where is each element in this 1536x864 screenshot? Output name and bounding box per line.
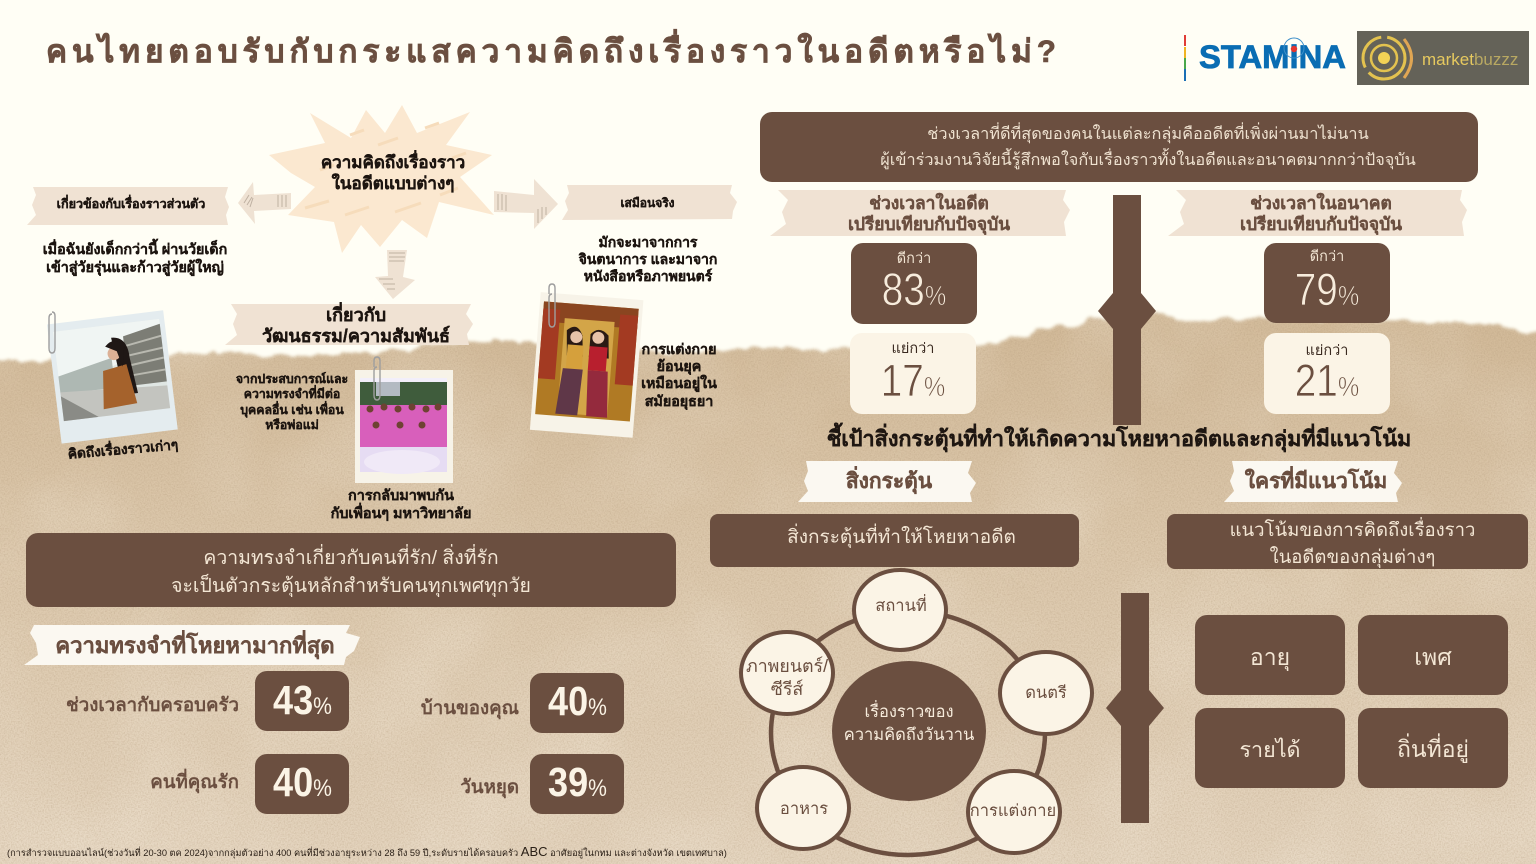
stat label: your home: บ้านของคุณ bbox=[421, 697, 519, 718]
text: personal description: เมื่อฉันยังเด็กกว่านี้ ผ่านวัยเด็ก bbox=[43, 242, 227, 258]
banner: personal bbox=[27, 187, 229, 225]
caption: period costume: การแต่งกาย bbox=[642, 342, 716, 358]
starburst heading: ในอดีตแบบต่างๆ bbox=[332, 174, 454, 193]
title: คนไทยตอบรับกับกระแสความคิดถึงเรื่องราวในอดีตหรือไม่? bbox=[46, 33, 1061, 69]
photo: Thai traditional dress bbox=[530, 283, 644, 438]
panel: trend heading: แนวโน้มของการคิดถึงเรื่องราว bbox=[1230, 519, 1475, 540]
label: dress: การแต่งกาย bbox=[970, 802, 1056, 820]
cycle diagram: nostalgia triggers bbox=[739, 568, 1094, 858]
divider arrow: vertical past future bbox=[1098, 195, 1156, 425]
label: film and series: ซีรีส์ bbox=[771, 679, 803, 699]
panel: triggers heading bbox=[710, 514, 1079, 567]
label: food: อาหาร bbox=[780, 800, 828, 818]
photo: woman on stairs bbox=[47, 310, 178, 444]
footnote: (การสำรวจแบบออนไลน์(ช่วงวันที่ 20-30 ตค 2024)จากกลุ่มตัวอย่าง 400 คนที่มีช่วงอายุระหว่าง 28 ถึง 59 ปี,ระดับรายได้ครอบครัว ABC อาศัยอยู่ในกทม และต่างจังหวัด เขตเทศบาล) bbox=[7, 844, 727, 859]
text: as if real description: หนังสือหรือภาพยนตร์ bbox=[584, 268, 712, 284]
banner: culture and relationships bbox=[225, 302, 473, 346]
trend box: region: ถิ่นที่อยู่ bbox=[1397, 736, 1469, 762]
stat label: holiday: วันหยุด bbox=[460, 776, 519, 797]
label: place: สถานที่ bbox=[875, 594, 927, 615]
banner text: ความทรงจำที่โหยหามากที่สุด bbox=[55, 633, 335, 658]
banner text: ช่วงเวลาในอดีต bbox=[869, 193, 989, 213]
text: experience and memory bbox=[236, 372, 348, 432]
panel: best time summary: ผู้เข้าร่วมงานวิจัยนี้รู้สึกพอใจกับเรื่องราวทั้งในอดีตและอนาคตมากกว่าปัจจุบัน bbox=[880, 151, 1416, 169]
text: experience and memory: ความทรงจำที่มีต่อ bbox=[244, 387, 340, 401]
banner text: ช่วงเวลาในอนาคต bbox=[1250, 193, 1392, 213]
stat: future better 79%: 79% bbox=[1295, 264, 1359, 315]
logo: marketbuzzz: marketbuzzz bbox=[1422, 50, 1518, 69]
text: as if real description: มักจะมาจากการ bbox=[599, 234, 697, 250]
banner text: เสมือนจริง bbox=[620, 196, 675, 210]
stat: future better 79%: ดีกว่า bbox=[1310, 249, 1344, 265]
banner: who trends bbox=[1224, 461, 1402, 502]
trend box: gender: เพศ bbox=[1414, 644, 1452, 670]
banner text bbox=[262, 302, 450, 346]
banner text: เกี่ยวข้องกับเรื่องราวส่วนตัว bbox=[57, 197, 205, 211]
stat label: loved one: คนที่คุณรัก bbox=[150, 771, 239, 792]
stat: past better 83%: 83% bbox=[882, 264, 946, 315]
text: personal description bbox=[43, 238, 227, 276]
caption: period costume: ย้อนยุค bbox=[657, 359, 701, 375]
logo: marketbuzzz bbox=[1357, 31, 1529, 85]
trend box: income: รายได้ bbox=[1240, 738, 1300, 762]
trend box: income bbox=[1195, 708, 1345, 788]
panel: memory of loved ones: ความทรงจำเกี่ยวกับคนที่รัก/ สิ่งที่รัก bbox=[203, 546, 499, 568]
divider arrow: triggers to trends bbox=[1106, 593, 1164, 823]
banner: most missed memories bbox=[24, 625, 360, 665]
text: experience and memory: จากประสบการณ์และ bbox=[236, 372, 348, 386]
caption: period costume: สมัยอยุธยา bbox=[645, 394, 713, 410]
stat: past better 83% bbox=[851, 243, 977, 324]
stat: 40% home: 40% bbox=[548, 678, 606, 724]
arrow: down bbox=[375, 250, 415, 299]
panel: memory of loved ones bbox=[26, 533, 676, 607]
stat: past worse 17%: 17% bbox=[881, 355, 945, 406]
banner text: วัฒนธรรม/ความสัมพันธ์ bbox=[262, 326, 450, 346]
starburst: nostalgia types bbox=[269, 105, 494, 253]
trend box: age bbox=[1195, 615, 1345, 695]
starburst heading bbox=[321, 150, 465, 193]
panel: memory of loved ones: จะเป็นตัวกระตุ้นหลักสำหรับคนทุกเพศทุกวัย bbox=[171, 574, 531, 596]
banner text: เปรียบเทียบกับปัจจุบัน bbox=[1240, 214, 1402, 234]
arrow: left bbox=[238, 182, 291, 224]
panel: trend heading: ในอดีตของกลุ่มต่างๆ bbox=[1270, 546, 1435, 567]
banner: future vs present bbox=[1168, 190, 1467, 236]
banner text: เกี่ยวกับ bbox=[326, 305, 386, 325]
text: experience and memory: บุคคลอื่น เช่น เพื่อน bbox=[240, 403, 344, 417]
stat label: family time: ช่วงเวลากับครอบครัว bbox=[66, 694, 239, 715]
text: as if real description: จินตนาการ และมาจาก bbox=[579, 251, 717, 267]
starburst heading: ความคิดถึงเรื่องราว bbox=[321, 153, 465, 172]
stat: future better 79% bbox=[1264, 243, 1390, 323]
trend box: region bbox=[1358, 708, 1508, 788]
label: center nostalgia stories: ความคิดถึงวันวาน bbox=[844, 726, 974, 744]
panel: triggers heading: สิ่งกระตุ้นที่ทำให้โหยหาอดีต bbox=[787, 526, 1016, 548]
heading: triggers and trends: ชี้เป้าสิ่งกระตุ้นที่ทำให้เกิดความโหยหาอดีตและกลุ่มที่มีแนวโน้ม bbox=[827, 426, 1411, 451]
stat: 39%: 39% bbox=[548, 758, 606, 804]
label: center nostalgia stories: เรื่องราวของ bbox=[864, 703, 954, 721]
text: as if real description bbox=[578, 234, 717, 284]
text: experience and memory: หรือพ่อแม่ bbox=[265, 418, 319, 432]
panel: best time summary bbox=[760, 112, 1478, 182]
stat: future worse 21% bbox=[1264, 333, 1390, 414]
banner: as if real bbox=[562, 185, 737, 220]
label: music: ดนตรี bbox=[1025, 684, 1067, 702]
caption: university reunion: กับเพื่อนๆ มหาวิทยาลัย bbox=[331, 506, 471, 522]
stat: past better 83%: ดีกว่า bbox=[897, 251, 931, 267]
banner text: สิ่งกระตุ้น bbox=[846, 470, 932, 493]
banner text: เปรียบเทียบกับปัจจุบัน bbox=[848, 214, 1010, 234]
stat: future worse 21%: แย่กว่า bbox=[1306, 343, 1348, 359]
caption: old stories: คิดถึงเรื่องราวเก่าๆ bbox=[67, 437, 179, 462]
caption: period costume: เหมือนอยู่ใน bbox=[641, 376, 717, 392]
stat: 43% bbox=[255, 671, 349, 731]
banner: triggers bbox=[798, 461, 976, 502]
stat: 40% loved one bbox=[255, 754, 349, 814]
banner text: ใครที่มีแนวโน้ม bbox=[1245, 470, 1387, 493]
caption: university reunion: การกลับมาพบกัน bbox=[348, 488, 454, 504]
text: personal description: เข้าสู่วัยรุ่นและก้าวสู่วัยผู้ใหญ่ bbox=[46, 260, 224, 276]
stat: past worse 17% bbox=[850, 333, 976, 414]
trend box: age: อายุ bbox=[1250, 644, 1290, 670]
label: film and series: ภาพยนตร์/ bbox=[746, 656, 828, 676]
stat: future worse 21%: 21% bbox=[1295, 355, 1359, 406]
arrow: right bbox=[494, 179, 558, 229]
stat: 40% home bbox=[530, 673, 624, 733]
caption: period costume bbox=[641, 342, 717, 410]
banner text bbox=[848, 192, 1010, 235]
banner: past vs present bbox=[770, 190, 1070, 236]
stat: 43%: 43% bbox=[273, 676, 331, 722]
logo: Stamina: STAMiNA bbox=[1199, 38, 1346, 75]
panel: trend heading bbox=[1167, 514, 1528, 569]
trend box: gender bbox=[1358, 615, 1508, 695]
stat: 40% loved one: 40% bbox=[273, 758, 331, 804]
banner text bbox=[1240, 192, 1402, 235]
panel: best time summary: ช่วงเวลาที่ดีที่สุดของคนในแต่ละกลุ่มคืออดีตที่เพิ่งผ่านมาไม่นาน bbox=[927, 125, 1369, 143]
stat: past worse 17%: แย่กว่า bbox=[892, 341, 934, 357]
stat: 39% bbox=[530, 754, 624, 814]
caption: university reunion bbox=[330, 488, 471, 522]
photo: friends reunion bbox=[355, 356, 453, 483]
